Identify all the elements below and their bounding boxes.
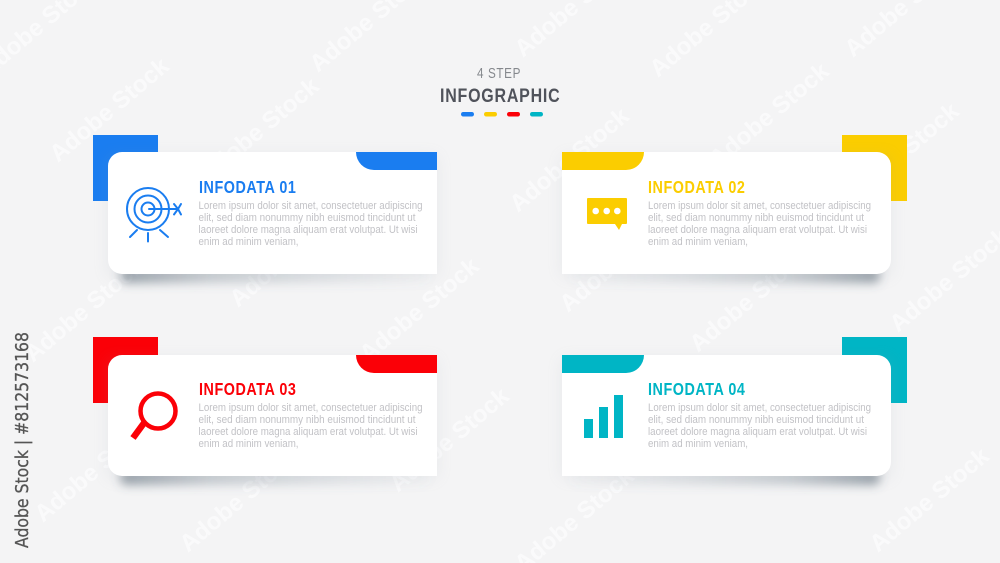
card soft glow xyxy=(562,156,891,276)
panel: infodata 04 xyxy=(562,337,907,485)
body text: enim ad minim veniam, xyxy=(648,236,748,248)
card xyxy=(108,152,437,274)
top tab xyxy=(562,355,644,373)
body text: laoreet dolore magna aliquam erat volutpat. Ut wisi xyxy=(198,426,418,438)
body text: laoreet dolore magna aliquam erat volutpat. Ut wisi xyxy=(648,224,867,236)
card shadow xyxy=(120,470,430,485)
watermark pattern: Adobe Stock xyxy=(865,442,995,558)
colour dots row xyxy=(461,112,543,116)
card shadow xyxy=(570,268,880,283)
top tab xyxy=(356,152,437,170)
body text: Lorem ipsum dolor sit amet, consectetuer adipiscing xyxy=(648,402,871,414)
panel: infodata 03 xyxy=(93,337,437,485)
heading: INFODATA 01 xyxy=(199,179,296,197)
watermark pattern: Adobe Stock xyxy=(20,252,150,368)
body text: laoreet dolore magna aliquam erat volutpat. Ut wisi xyxy=(198,224,418,236)
body text: enim ad minim veniam, xyxy=(198,438,298,450)
watermark pattern: Adobe Stock xyxy=(355,252,485,368)
icon: magnifier xyxy=(133,394,176,438)
card soft glow xyxy=(562,359,891,478)
watermark pattern: Adobe Stock xyxy=(175,442,305,558)
card xyxy=(562,152,891,274)
card soft glow xyxy=(108,156,437,276)
body text xyxy=(648,402,871,450)
body text: enim ad minim veniam, xyxy=(648,438,748,450)
card shadow xyxy=(120,268,430,283)
corner square xyxy=(842,337,907,403)
watermark pattern: Adobe Stock xyxy=(195,72,325,188)
heading: INFODATA 02 xyxy=(648,179,745,197)
panel: infodata 02 xyxy=(562,135,907,283)
watermark pattern: Adobe Stock xyxy=(385,382,515,498)
watermark pattern: Adobe Stock xyxy=(685,242,815,358)
body text: elit, sed diam nonummy nibh euismod tincidunt ut xyxy=(648,414,864,426)
card shadow xyxy=(570,470,880,485)
icon: target xyxy=(127,188,181,242)
body text: elit, sed diam nonummy nibh euismod tincidunt ut xyxy=(198,212,416,224)
corner square xyxy=(842,135,907,201)
watermark pattern: Adobe Stock xyxy=(725,362,855,478)
heading: INFODATA 04 xyxy=(648,381,745,399)
body text xyxy=(198,200,422,248)
body text: Lorem ipsum dolor sit amet, consectetuer adipiscing xyxy=(198,200,422,212)
body text: Lorem ipsum dolor sit amet, consectetuer adipiscing xyxy=(198,402,422,414)
icon: bar chart xyxy=(584,395,623,438)
icon: speech bubble xyxy=(587,198,627,230)
body text: Lorem ipsum dolor sit amet, consectetuer adipiscing xyxy=(648,200,871,212)
watermark pattern: Adobe Stock xyxy=(505,102,635,218)
body text: laoreet dolore magna aliquam erat volutpat. Ut wisi xyxy=(648,426,867,438)
corner square xyxy=(93,135,158,201)
body text xyxy=(198,402,422,450)
card xyxy=(108,355,437,476)
corner square xyxy=(93,337,158,403)
heading: INFODATA 03 xyxy=(199,381,296,399)
watermark pattern: Adobe Stock xyxy=(225,197,355,313)
watermark pattern: Adobe Stock xyxy=(835,97,965,213)
card xyxy=(562,355,891,476)
watermark pattern: Adobe Stock xyxy=(45,52,175,168)
watermark pattern: Adobe Stock xyxy=(30,412,160,528)
card soft glow xyxy=(108,359,437,478)
panel: infodata 01 xyxy=(93,135,437,283)
top tab xyxy=(562,152,644,170)
title line: infographic: INFOGRAPHIC xyxy=(440,85,560,106)
watermark pattern: Adobe Stock xyxy=(705,57,835,173)
title xyxy=(440,65,560,106)
top tab xyxy=(356,355,437,373)
body text: enim ad minim veniam, xyxy=(198,236,298,248)
body text: elit, sed diam nonummy nibh euismod tincidunt ut xyxy=(198,414,416,426)
body text: elit, sed diam nonummy nibh euismod tincidunt ut xyxy=(648,212,864,224)
stock id label: Adobe Stock | #812573168 xyxy=(12,332,33,548)
body text xyxy=(648,200,871,248)
title line: 4 step: 4 STEP xyxy=(477,65,521,81)
watermark pattern: Adobe Stock xyxy=(555,202,685,318)
